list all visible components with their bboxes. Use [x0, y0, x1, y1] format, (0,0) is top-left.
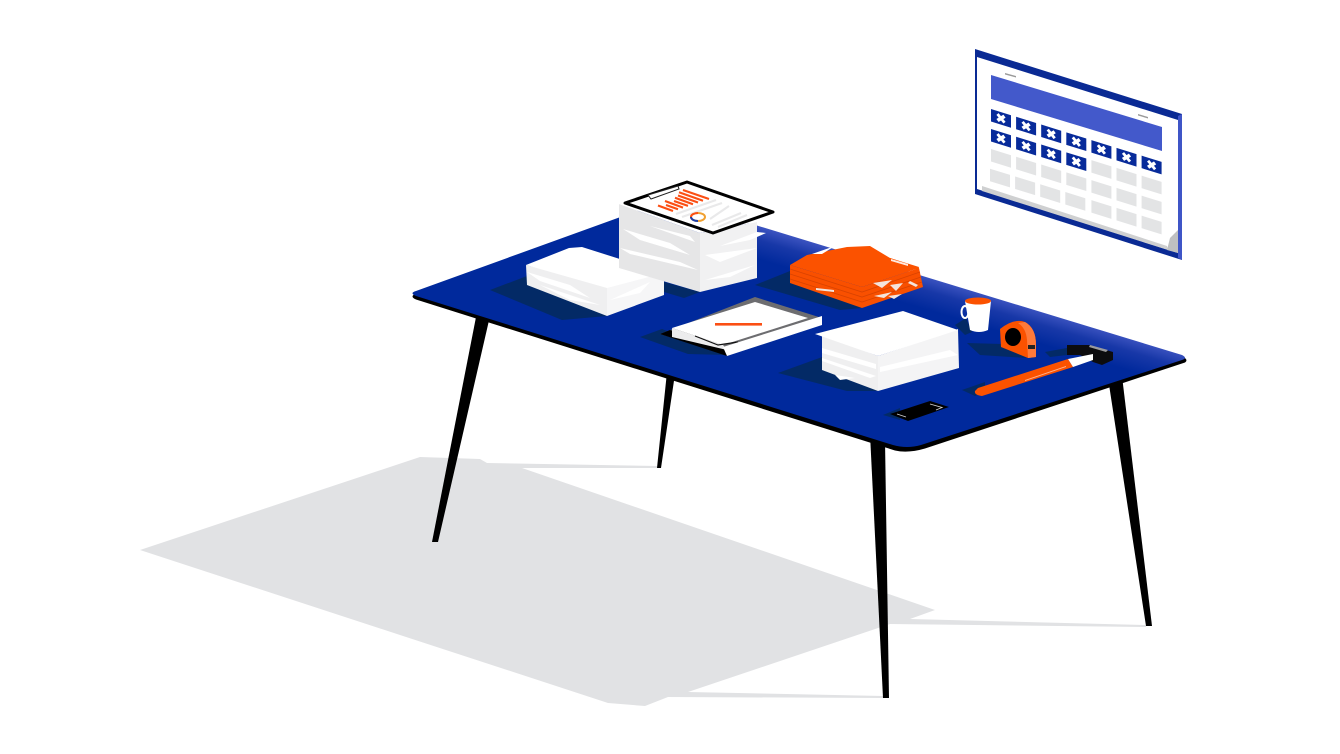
- smartphone: [890, 401, 949, 421]
- tall paper stack: [619, 190, 766, 292]
- shadows on table: [490, 271, 1067, 420]
- rings: [1005, 73, 1016, 78]
- header band: [991, 75, 1162, 151]
- day grid: [990, 109, 1162, 234]
- small paper stack: [526, 247, 664, 316]
- clip: [648, 186, 679, 199]
- text lines: [676, 200, 747, 227]
- floor shadow: [140, 457, 1146, 706]
- bar chart: [658, 190, 709, 211]
- coffee mug: [962, 298, 991, 332]
- tape measure: [1000, 321, 1036, 358]
- table legs: [432, 312, 1152, 698]
- document tray with pencil: [660, 297, 822, 356]
- wall calendar: [975, 49, 1182, 260]
- donut chart: [691, 213, 705, 221]
- large flat paper stack: [815, 311, 959, 391]
- pencil: [715, 323, 762, 326]
- hammer: [975, 345, 1113, 396]
- table top: [412, 199, 1186, 452]
- clipboard with report: [625, 182, 773, 233]
- orange folders: [790, 246, 923, 308]
